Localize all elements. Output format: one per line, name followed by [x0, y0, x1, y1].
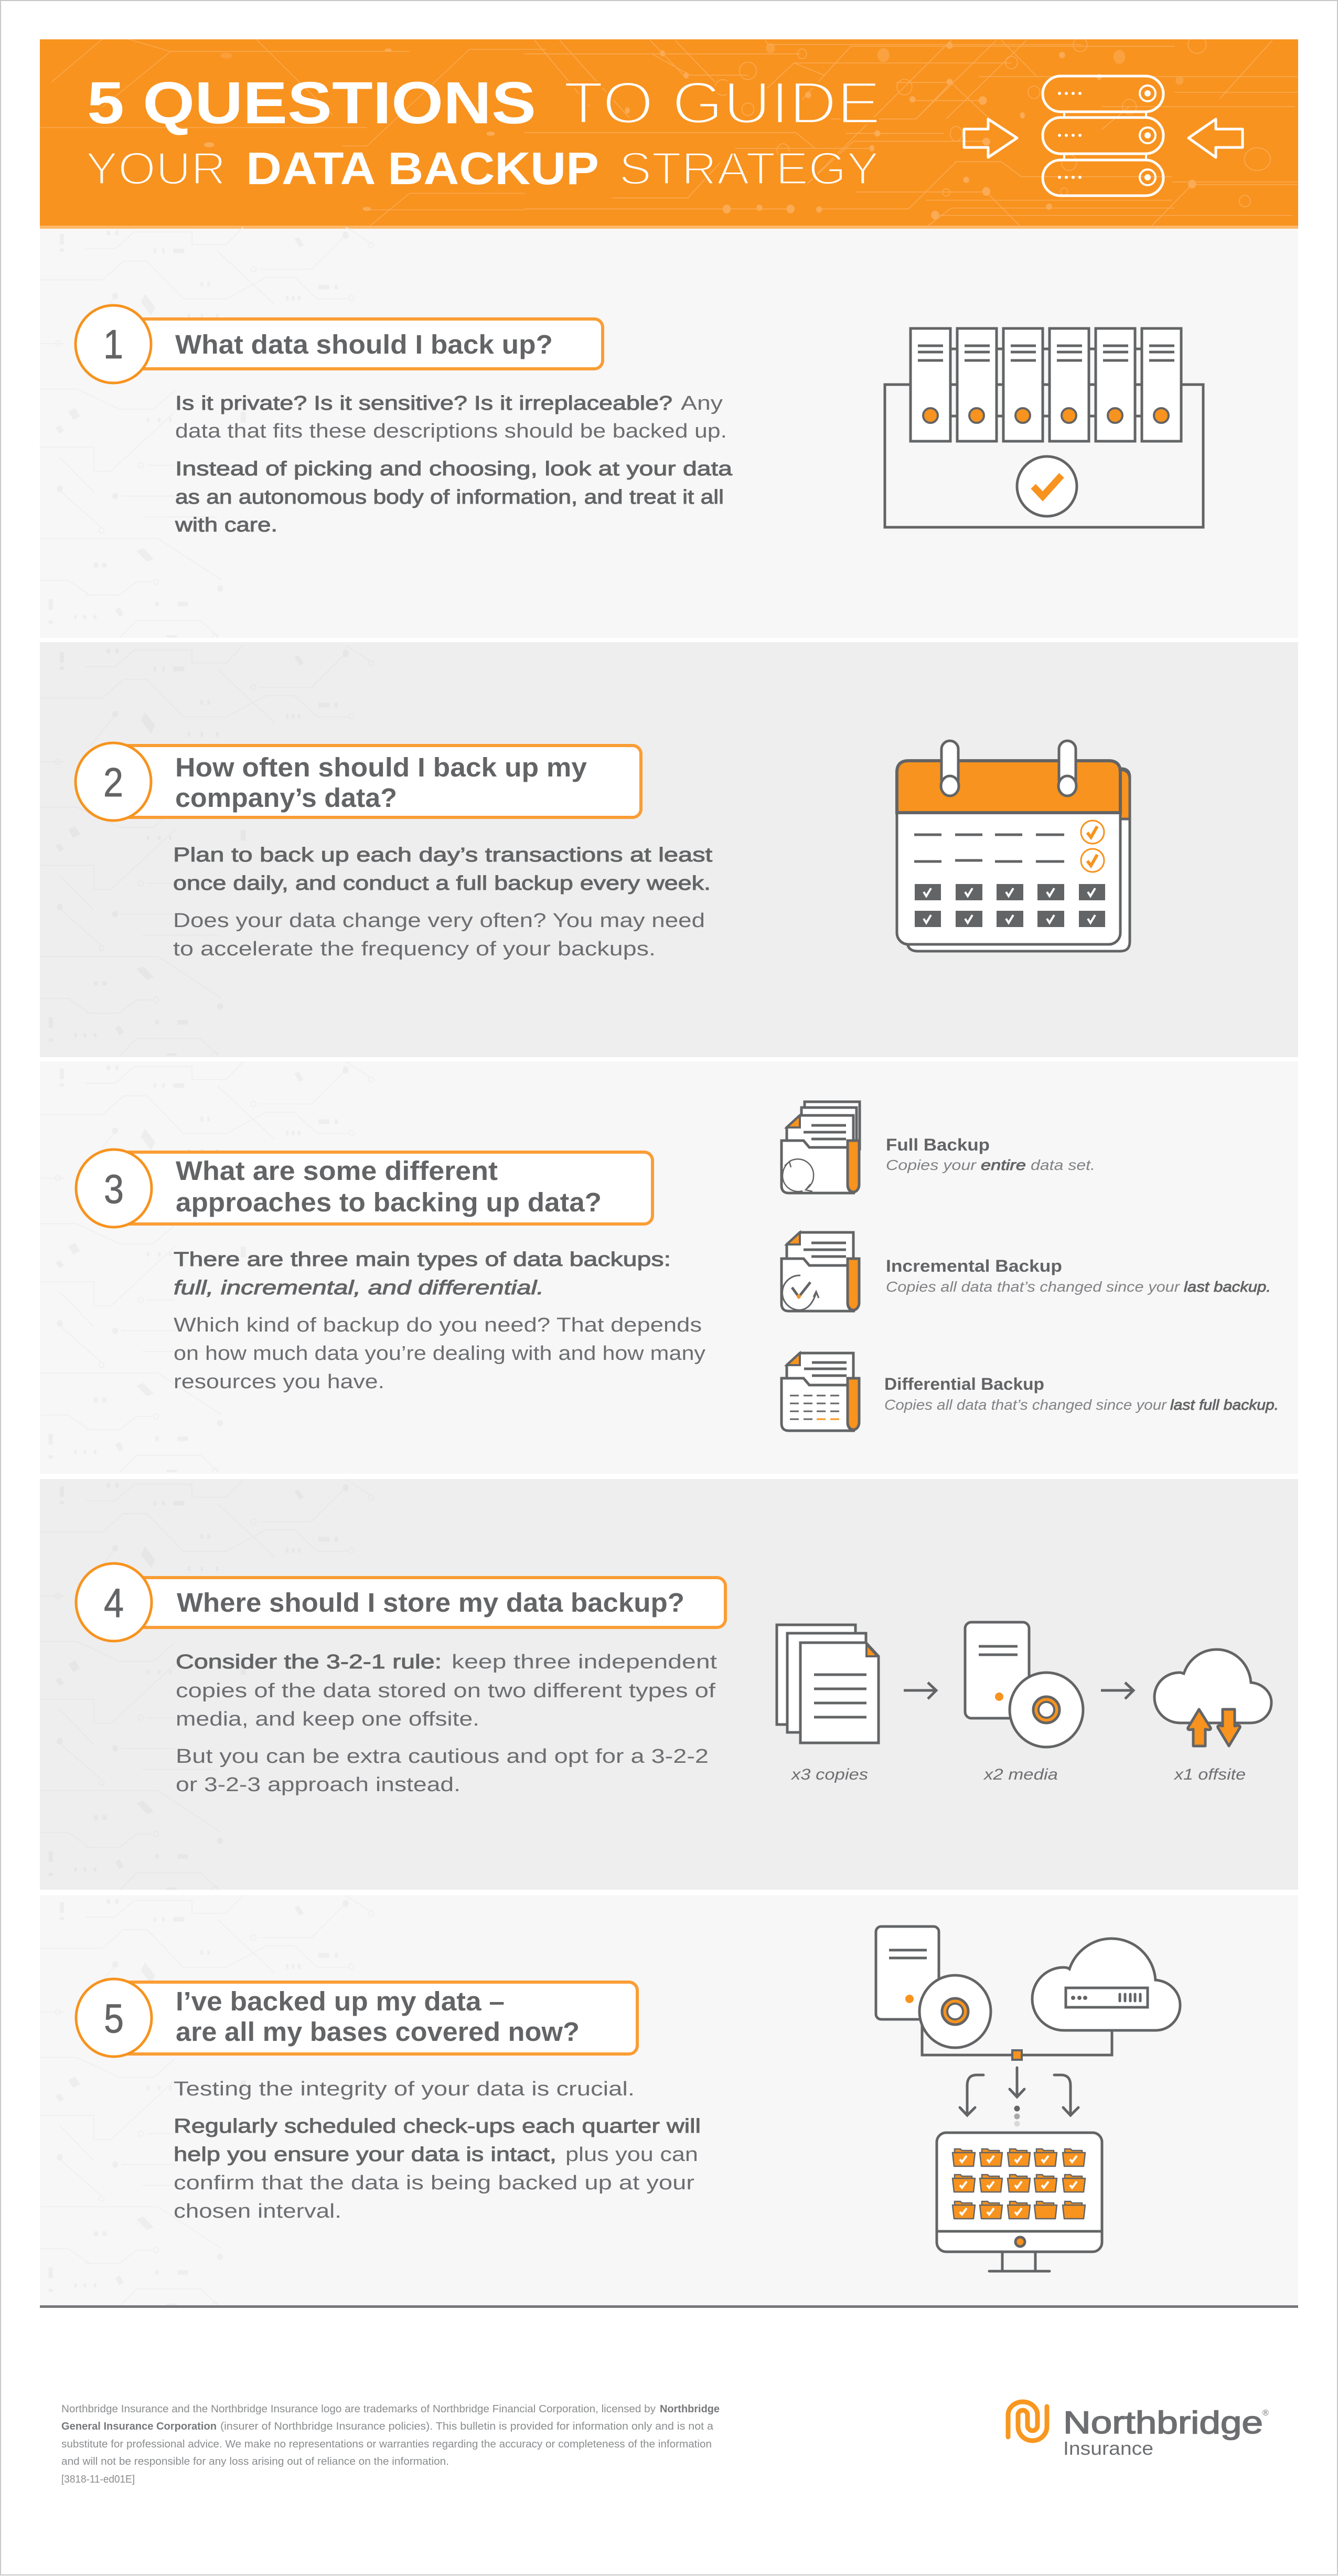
heading: question 1	[76, 305, 603, 383]
text: incremental backup: Copies all data that’s changed since your	[886, 1279, 1181, 1295]
panel: question 5	[40, 1895, 1298, 2307]
legal text: and will not be responsible for any loss arising out of reliance on the information.	[61, 2456, 449, 2467]
heading: question 4: Where should I store my data backup?	[177, 1588, 684, 1617]
title	[85, 70, 881, 194]
icon: calendar	[897, 741, 1130, 951]
heading: question 3: 3	[104, 1166, 124, 1212]
caption: x3 copies: x3 copies	[790, 1766, 868, 1783]
title: DATA BACKUP	[246, 143, 599, 194]
panel: question 1	[40, 227, 1298, 639]
text: differential backup: Copies all data that’s changed since your	[884, 1397, 1168, 1413]
icon: data flow diagram	[876, 1926, 1180, 2271]
text block: question 4: or 3-2-3 approach instead.	[176, 1774, 461, 1796]
heading: question 5: I’ve backed up my data –	[176, 1986, 505, 2016]
logo: Northbridge Insurance: ®	[1262, 2409, 1269, 2418]
heading: question 2	[76, 743, 641, 821]
icon: incremental backup folder	[782, 1232, 859, 1311]
heading: question 1: 1	[103, 321, 123, 367]
text block: question 4: media, and keep one offsite.	[176, 1708, 479, 1730]
logo: Northbridge Insurance: Insurance	[1063, 2437, 1153, 2459]
legal text: [3818-11-ed01E]	[61, 2474, 135, 2485]
text block: question 1: Instead of picking and choosing, look at your data	[175, 458, 733, 480]
legal text	[61, 2403, 720, 2485]
caption: x2 media: x2 media	[983, 1766, 1058, 1783]
text block: question 3: full, incremental, and differential.	[174, 1277, 544, 1299]
arrows down	[960, 2068, 1078, 2115]
caption: x1 offsite: x1 offsite	[1173, 1766, 1246, 1783]
logo: Northbridge Insurance	[1008, 2402, 1269, 2459]
legal text: Northbridge	[660, 2403, 720, 2415]
heading: question 1: What data should I back up?	[175, 329, 553, 359]
title: STRATEGY	[619, 143, 879, 194]
text block: question 1: with care.	[175, 514, 277, 536]
arrow	[1101, 1683, 1133, 1699]
legal text: substitute for professional advice. We make no representations or warranties regarding the accuracy or completeness of the information	[61, 2439, 712, 2450]
heading: question 3: What are some different	[176, 1156, 498, 1186]
text: full backup: data set.	[1031, 1157, 1095, 1173]
text: differential backup: Differential Backup	[884, 1375, 1044, 1393]
text block: question 5: confirm that the data is being backed up at your	[174, 2172, 694, 2194]
arrow	[904, 1683, 936, 1699]
heading: question 4	[76, 1563, 725, 1641]
icon: two media	[965, 1622, 1083, 1747]
footer rule	[40, 2305, 1298, 2308]
icon: cloud offsite	[1154, 1649, 1271, 1746]
text block: question 2: to accelerate the frequency of your backups.	[173, 938, 656, 960]
heading: question 5: are all my bases covered now?	[176, 2017, 580, 2047]
text block: question 4	[176, 1651, 718, 1796]
text block: question 4: copies of the data stored on two different types of	[176, 1680, 716, 1702]
text block: question 4: But you can be extra cautious and opt for a 3-2-2	[176, 1745, 709, 1768]
title: 5 QUESTIONS	[87, 70, 536, 136]
heading: question 3: approaches to backing up data?	[176, 1187, 602, 1217]
text block: question 1: Is it private? Is it sensitive? Is it irreplaceable?	[175, 392, 672, 414]
icon: server rack with check	[885, 328, 1203, 527]
text block: question 1: data that fits these descriptions should be backed up.	[175, 420, 727, 442]
panel: question 4	[40, 1479, 1298, 1891]
text block: question 2: Plan to back up each day’s transactions at least	[173, 844, 713, 866]
heading: question 2: company’s data?	[175, 783, 397, 813]
text block: question 2: Does your data change very often? You may need	[173, 910, 705, 932]
panel: question 3	[40, 1061, 1298, 1474]
text block: question 3: There are three main types of data backups:	[174, 1249, 671, 1271]
text: full backup: entire	[981, 1157, 1026, 1173]
text: differential backup	[884, 1375, 1279, 1413]
heading: question 2: 2	[103, 759, 123, 805]
heading: question 4: 4	[104, 1580, 124, 1626]
text block: question 1: Any	[681, 392, 723, 414]
text block: question 2	[173, 844, 713, 960]
text block: question 1	[175, 392, 733, 536]
text block: question 2: once daily, and conduct a full backup every week.	[173, 872, 711, 895]
header banner	[40, 36, 1298, 229]
text: incremental backup	[886, 1257, 1271, 1295]
heading: question 3	[76, 1149, 652, 1227]
icon: monitor	[937, 2133, 1102, 2271]
text block: question 1: as an autonomous body of information, and treat it all	[175, 486, 724, 508]
text block: question 5: plus you can	[565, 2144, 698, 2166]
text: incremental backup: last backup.	[1184, 1279, 1271, 1295]
heading: question 5	[76, 1979, 637, 2057]
title: YOUR	[85, 143, 226, 194]
text block: question 3: resources you have.	[174, 1371, 384, 1393]
text block: question 5: chosen interval.	[174, 2200, 341, 2222]
icon: full backup folder	[782, 1102, 860, 1193]
panel: question 2	[40, 642, 1298, 1057]
heading: question 5: 5	[104, 1995, 124, 2041]
text block: question 5: Testing the integrity of your data is crucial.	[174, 2078, 635, 2100]
title: TO GUIDE	[563, 70, 881, 136]
icon: server stack with arrows	[964, 76, 1243, 196]
text: full backup	[886, 1135, 1095, 1173]
icon: differential backup folder	[782, 1353, 859, 1431]
text block: question 5: Regularly scheduled check-ups each quarter will	[174, 2115, 701, 2137]
legal text: (insurer of Northbridge Insurance policies). This bulletin is provided for information only and is not a	[220, 2421, 714, 2432]
text: full backup: Copies your	[886, 1157, 977, 1173]
connector lines	[922, 2022, 1112, 2055]
legal text: Northbridge Insurance and the Northbridge Insurance logo are trademarks of Northbridge Financial Corporation, licensed by	[61, 2403, 656, 2415]
text block: question 5	[174, 2078, 701, 2222]
junction node	[1012, 2050, 1022, 2060]
status dots	[1014, 2106, 1020, 2127]
icon: server and disc	[876, 1926, 991, 2048]
text block: question 4: keep three independent	[452, 1651, 718, 1673]
text block: question 3	[174, 1249, 705, 1393]
icon: cloud server	[1032, 1939, 1180, 2030]
heading: question 2: How often should I back up my	[175, 752, 587, 782]
folders with checks	[952, 2149, 1085, 2219]
text block: question 3: Which kind of backup do you need? That depends	[174, 1314, 702, 1336]
legal text: General Insurance Corporation	[61, 2421, 217, 2432]
icon: three copies	[777, 1625, 879, 1743]
logo: Northbridge Insurance: Northbridge	[1063, 2405, 1263, 2440]
text block: question 5: help you ensure your data is intact,	[174, 2144, 556, 2166]
text: differential backup: last full backup.	[1170, 1397, 1279, 1413]
text: full backup: Full Backup	[886, 1135, 990, 1154]
text block: question 3: on how much data you’re dealing with and how many	[174, 1343, 705, 1365]
text block: question 4: Consider the 3-2-1 rule:	[176, 1651, 442, 1673]
text: incremental backup: Incremental Backup	[886, 1257, 1062, 1275]
